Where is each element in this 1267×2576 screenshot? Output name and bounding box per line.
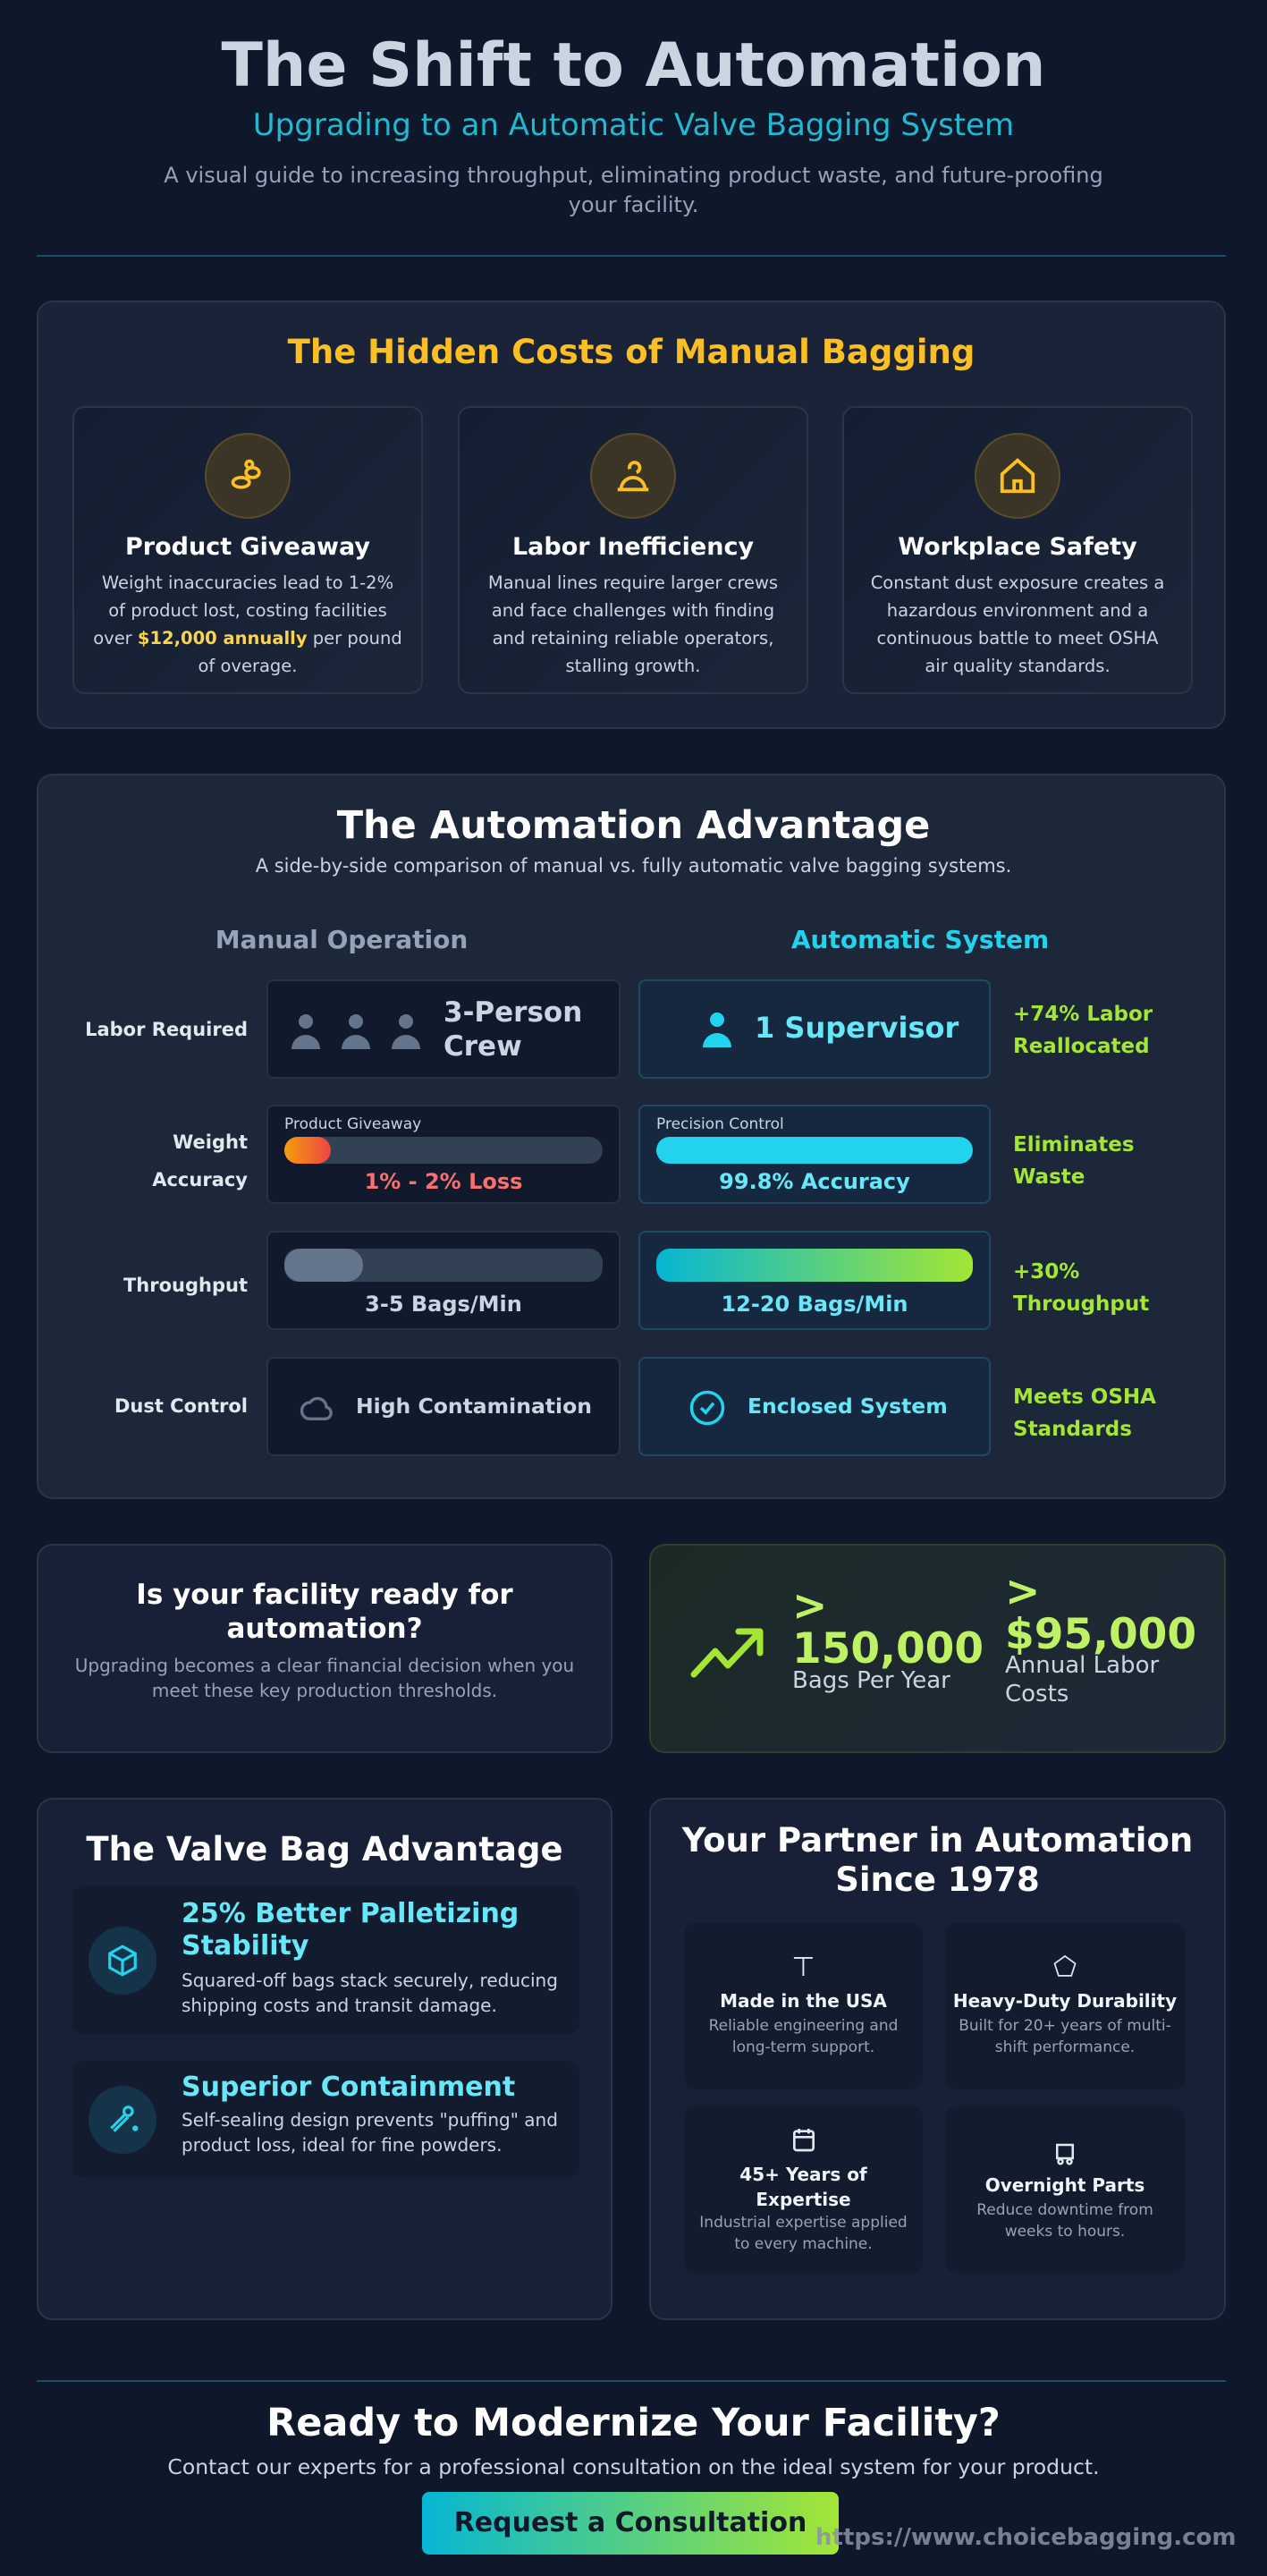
note: dust: Standards: [1013, 1418, 1132, 1441]
subheading: A side-by-side comparison of manual vs. fully automatic valve bagging systems.: [256, 855, 1011, 877]
manual: giveaway bar: [266, 1105, 621, 1204]
card: made in usa: [684, 1923, 923, 2089]
note: dust: [1013, 1385, 1156, 1441]
row label: throughput: Throughput: [123, 1275, 248, 1296]
card: labor inefficiency: Manual lines require larger crews: [488, 572, 778, 593]
automatic: supervisor: [638, 979, 991, 1079]
card: workplace safety: continuous battle to meet OSHA: [876, 628, 1159, 648]
CTA button: Request a Consultation: [454, 2507, 807, 2538]
card: labor inefficiency: and retaining reliable operators,: [493, 628, 773, 648]
icon: trend arrow: [690, 1628, 764, 1678]
card: durability: Built for 20+ years of multi-: [959, 2017, 1171, 2035]
stat: labor costs: $95,000: [1005, 1610, 1196, 1659]
row label: labor: Labor Required: [85, 1019, 248, 1040]
note: weight: Eliminates: [1013, 1133, 1135, 1157]
title: The Shift to Automation: [222, 30, 1045, 101]
row label: weight: Accuracy: [152, 1169, 248, 1191]
card: workplace safety: air quality standards.: [925, 656, 1111, 676]
panel: thresholds: [649, 1544, 1226, 1753]
card: workplace safety: hazardous environment and a: [887, 600, 1148, 621]
card: durability: shift performance.: [995, 2038, 1135, 2056]
panel: partner: [649, 1798, 1226, 2320]
item: palletizing: [72, 1885, 579, 2034]
card: expertise: [684, 2106, 923, 2273]
card: durability: ⬠: [1053, 1952, 1077, 1983]
url: https://www.choicebagging.com: [815, 2524, 1237, 2551]
card: expertise: Expertise: [756, 2189, 851, 2210]
card: durability: Heavy-Duty Durability: [953, 1990, 1177, 2012]
stat: labor costs: [1005, 1567, 1196, 1659]
automatic: precision bar: 99.8% Accuracy: [719, 1169, 910, 1194]
manual: giveaway bar: 1% - 2% Loss: [365, 1169, 522, 1194]
card: product giveaway: of product lost, costing facilities: [108, 600, 387, 621]
note: dust: Meets OSHA: [1013, 1385, 1156, 1409]
panel: thresholds: Annual Labor: [1005, 1652, 1159, 1679]
panel: thresholds: Costs: [1005, 1681, 1069, 1707]
heading: hidden costs: The Hidden Costs of Manual Bagging: [288, 333, 975, 371]
manual: crew: [266, 979, 621, 1079]
card: overnight parts: weeks to hours.: [1005, 2223, 1125, 2241]
stat: bags: >: [792, 1581, 827, 1631]
card: product giveaway: of overage.: [198, 656, 297, 676]
panel: thresholds: Bags Per Year: [792, 1667, 950, 1694]
card: workplace safety: [842, 406, 1193, 694]
note: weight: [1013, 1133, 1135, 1189]
card: workplace safety: Workplace Safety: [898, 533, 1137, 561]
automatic: throughput bar: 12-20 Bags/Min: [721, 1292, 908, 1317]
card: made in usa: Reliable engineering and: [709, 2017, 898, 2035]
card: overnight parts: Overnight Parts: [985, 2174, 1145, 2196]
panel: partner: Since 1978: [835, 1860, 1040, 1899]
card: expertise: to every machine.: [734, 2235, 873, 2253]
card: labor inefficiency: [458, 406, 808, 694]
stat: labor costs: >: [1005, 1567, 1040, 1616]
icon: house: [975, 433, 1060, 519]
card: expertise: 45+ Years of: [739, 2164, 867, 2185]
card: product giveaway: Weight inaccuracies lead to 1-2%: [102, 572, 393, 593]
stat: bags: [792, 1581, 984, 1674]
icon: worker: [590, 433, 676, 519]
manual: contamination: High Contamination: [356, 1394, 592, 1419]
card: overnight parts: Reduce downtime from: [976, 2201, 1153, 2219]
heading: automation advantage: The Automation Advantage: [337, 803, 930, 848]
item: containment: Self-sealing design prevents "puffing" and product loss, ideal for fine powders.: [182, 2109, 558, 2156]
panel: readiness question: [37, 1544, 612, 1753]
card: product giveaway: [72, 406, 423, 694]
CTA heading: Ready to Modernize Your Facility?: [266, 2401, 1001, 2445]
note: labor: [1013, 1003, 1153, 1058]
note: weight: Waste: [1013, 1165, 1085, 1189]
manual: crew: Crew: [443, 1030, 522, 1063]
note: labor: +74% Labor: [1013, 1003, 1153, 1026]
card: made in usa: ⊤: [791, 1952, 815, 1983]
manual: giveaway bar: Product Giveaway: [284, 1115, 421, 1133]
item: containment: [72, 2061, 579, 2178]
panel: readiness question: Is your facility ready for automation?: [136, 1579, 513, 1645]
card: labor inefficiency: and face challenges with finding: [492, 600, 774, 621]
card: product giveaway: over $12,000 annually per pound: [93, 628, 402, 648]
manual: crew: 3-Person: [443, 996, 582, 1029]
panel: readiness question: Upgrading becomes a clear financial decision when you meet these key production thresholds.: [75, 1655, 574, 1701]
note: throughput: [1013, 1260, 1149, 1316]
column header: manual: Manual Operation: [215, 925, 468, 954]
card: durability: [945, 1923, 1185, 2089]
manual: throughput bar: [266, 1231, 621, 1330]
automatic: supervisor: 1 Supervisor: [755, 1011, 959, 1045]
item: palletizing: Squared-off bags stack securely, reducing shipping costs and transit damage.: [182, 1970, 558, 2016]
row label: weight: [152, 1131, 248, 1191]
card: labor inefficiency: Labor Inefficiency: [512, 533, 754, 561]
card: expertise: Industrial expertise applied: [699, 2214, 908, 2232]
card: workplace safety: Constant dust exposure creates a: [871, 572, 1164, 593]
panel: automation advantage: [37, 774, 1226, 1499]
note: throughput: +30%: [1013, 1260, 1079, 1284]
card: labor inefficiency: stalling growth.: [565, 656, 701, 676]
item: containment: Superior Containment: [182, 2072, 515, 2103]
card: made in usa: long-term support.: [732, 2038, 874, 2056]
note: labor: Reallocated: [1013, 1035, 1150, 1058]
automatic: enclosed: Enclosed System: [748, 1394, 948, 1419]
row label: weight: Weight: [173, 1131, 248, 1153]
column header: automatic: Automatic System: [791, 925, 1049, 954]
CTA text: Contact our experts for a professional consultation on the ideal system for your product.: [167, 2454, 1100, 2479]
item: palletizing: 25% Better Palletizing Stability: [182, 1898, 519, 1962]
note: throughput: Throughput: [1013, 1292, 1149, 1316]
CTA button: [422, 2492, 839, 2555]
panel: hidden costs: [37, 301, 1226, 729]
panel: partner: Your Partner in Automation: [682, 1821, 1193, 1860]
panel: valve bag advantage: The Valve Bag Advantage: [86, 1830, 563, 1868]
card: overnight parts: [945, 2106, 1185, 2273]
card: made in usa: Made in the USA: [720, 1990, 887, 2012]
manual: throughput bar: 3-5 Bags/Min: [365, 1292, 522, 1317]
automatic: throughput bar: [638, 1231, 991, 1330]
row label: dust: Dust Control: [114, 1395, 248, 1417]
intro text: A visual guide to increasing throughput, eliminating product waste, and future-proofing your facility.: [164, 163, 1103, 217]
automatic: precision bar: Precision Control: [656, 1115, 784, 1133]
panel: valve bag advantage: [37, 1798, 612, 2320]
subtitle: Upgrading to an Automatic Valve Bagging System: [253, 107, 1014, 143]
icon: coins: [205, 433, 291, 519]
card: product giveaway: Product Giveaway: [125, 533, 370, 561]
stat: bags: 150,000: [792, 1624, 984, 1674]
manual: contamination: [266, 1357, 621, 1456]
automatic: enclosed: [638, 1357, 991, 1456]
automatic: precision bar: [638, 1105, 991, 1204]
